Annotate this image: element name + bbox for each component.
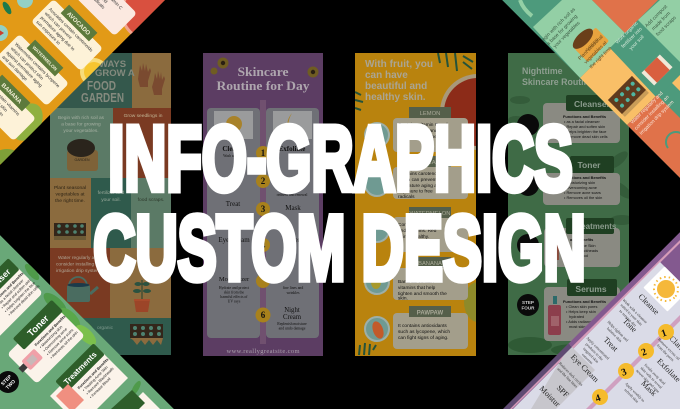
fruit card text: It contains antioxidants <box>398 323 447 329</box>
text: routine steps: and undo damage <box>279 326 306 330</box>
fruit card text: exposure to free <box>398 188 433 194</box>
routine body text: and the fine lines <box>556 367 578 389</box>
routine body text: Apply weekly to <box>624 382 645 403</box>
routine body text: Apply concentrated <box>585 336 610 361</box>
image: palm leaves <box>355 53 473 355</box>
card: treatments <box>544 218 620 267</box>
card: lavender <box>513 262 680 409</box>
routine body text: skin cells to reveal <box>639 366 663 390</box>
card: serums: • Clean skin pores <box>566 304 597 309</box>
routine body text: newer skin and tone <box>635 369 660 394</box>
routine body text: products to the <box>585 342 604 362</box>
card: cleanser: • as a facial cleanser <box>564 119 600 124</box>
cell: soil <box>533 0 625 78</box>
heading: fruit for skin: beautiful and <box>365 81 427 92</box>
card: treatments: Acne Skin <box>578 243 596 248</box>
panel: nighttime skincare routine <box>508 53 634 356</box>
card: serums: hydrated <box>569 314 584 319</box>
card: cleanser: Functions and Benefits <box>563 114 606 119</box>
text: garden tips: made from <box>651 11 672 32</box>
card: cleanser: • Remove dead skin cells <box>564 134 608 139</box>
card: serums: Functions and Benefits <box>563 299 606 304</box>
icon: soil bag <box>569 22 609 62</box>
marker numbers <box>261 150 266 318</box>
card: toner <box>543 156 620 205</box>
fruit card text: premature aging and <box>398 183 443 189</box>
text: soil tip: your vegetables. <box>63 128 99 134</box>
card column: right <box>266 108 319 338</box>
card: treatments: Treatments <box>574 222 617 231</box>
card: cleanser: • Helps brighten the face <box>564 129 606 134</box>
image: grapefruit slice <box>124 0 165 34</box>
tab labels: LEMON <box>420 111 440 117</box>
text: soil tip: a base for growing <box>61 122 101 128</box>
card: watermelon: WATERMELON <box>31 45 59 72</box>
card: toner: Functions and Benefits <box>563 175 606 180</box>
text: routine steps: Toner <box>284 236 301 244</box>
text: garden tips: food scraps <box>655 15 678 38</box>
card: avocado: premature aging due to <box>39 15 76 52</box>
marker numbers: 4 <box>261 240 266 250</box>
card: serums: • Adds radiance to <box>566 319 597 324</box>
foliage <box>508 96 634 356</box>
fruit card text: and vitamins. Red <box>398 228 437 234</box>
diagonal panel: skincare routine (bottom-right) <box>503 232 680 409</box>
routine headings: Mask <box>639 379 658 398</box>
text: routine steps: Treat <box>226 200 240 208</box>
card column: left <box>207 108 260 338</box>
text: treatments benefits: • Treating Acne Skin <box>82 365 109 392</box>
cell: compost <box>638 0 680 62</box>
card: cleanser: • Repair and soften skin <box>564 124 605 129</box>
text: garden tips: irrigation drip system <box>639 100 675 136</box>
card: avocado: sun exposure to <box>35 19 62 46</box>
marker numbers <box>594 328 668 405</box>
icon: pink bottle <box>16 349 43 375</box>
purple lower band <box>503 340 572 409</box>
card: serums: Serums <box>575 284 607 294</box>
card: cleanser: • Helps brighten the face <box>4 281 36 313</box>
card: cleanser: • Remove dead skin cells <box>8 284 40 317</box>
text: planting tip: Plant seasonal <box>54 185 86 191</box>
card: toner <box>1 300 86 385</box>
heading: fruit for skin <box>365 59 433 103</box>
icon: soil bag <box>67 139 98 171</box>
text: garden tips: Water regularly and <box>630 90 665 126</box>
routine headings: Cleanse <box>637 292 661 317</box>
card: treatments: Blood <box>578 253 588 258</box>
step badge: STEP <box>0 373 14 387</box>
heading: nighttime skincare: Skincare Routine <box>522 77 594 87</box>
icon: watering can <box>67 277 98 302</box>
diagonal panel: orange fruit (top-left) <box>0 0 178 165</box>
step badges <box>517 114 539 316</box>
text: planting tip: fertilizer and <box>98 190 125 196</box>
marker numbers: 2 <box>640 347 648 359</box>
icon: sun tile <box>214 111 253 139</box>
icon: seedling tray <box>54 223 86 240</box>
heading: food garden: GROW A <box>95 68 135 79</box>
tab labels: PAWPAW <box>417 310 444 316</box>
card: avocado <box>32 0 102 70</box>
cell: watering <box>627 95 680 178</box>
fruit circles <box>0 0 33 41</box>
step badge label: STEP <box>522 300 534 305</box>
text: treatments benefits <box>77 358 120 401</box>
icon: papaya <box>372 321 384 339</box>
icon: sun tile <box>643 266 680 312</box>
diagonal panel: food garden (top-right) <box>502 0 680 178</box>
card: cleanser <box>543 95 620 143</box>
routine body text: refresh skin <box>623 388 639 404</box>
text: soil tip <box>58 115 105 134</box>
card: treatments: Blackheads <box>578 248 598 253</box>
text: routine steps: Replenish moisture <box>277 322 307 326</box>
heading: skincare routine: Routine for Day <box>216 78 310 93</box>
icon: banana <box>371 282 381 289</box>
image: green pear <box>0 103 43 164</box>
text: routine steps: harmful effects of <box>220 295 248 299</box>
fruit card text: Bananas contain <box>398 279 434 285</box>
numbered markers <box>592 324 674 405</box>
text: planting tip: food scraps. <box>138 197 164 203</box>
foliage <box>23 262 143 396</box>
fruit card text: tighten and smooth the <box>398 291 447 297</box>
heading: skincare routine: Skincare <box>238 64 289 79</box>
panel: fruit for skin <box>355 53 476 356</box>
routine body text: balance skin <box>606 327 622 343</box>
text: routine steps <box>218 145 307 330</box>
text: treatments benefits: Functions and Benefits <box>77 358 109 390</box>
card: treatments: and Benefits <box>570 237 593 242</box>
cell: right yellow <box>672 75 680 91</box>
routine body text: from the pores <box>656 343 675 363</box>
text: watering tip: consider installing an <box>56 262 101 268</box>
text: garden tips: Add compost <box>644 4 669 29</box>
text: routine steps: Eye Cream <box>218 236 250 244</box>
card: toner: • Remove acne scars <box>564 190 601 195</box>
marker numbers: 3 <box>261 204 266 214</box>
heading: nighttime skincare: Nighttime <box>522 66 563 76</box>
text: routine steps: Moisturizer <box>219 276 250 283</box>
tab labels: BANANA <box>418 261 442 267</box>
card: banana: BANANA <box>0 83 23 106</box>
card: serums: most skin <box>569 324 585 329</box>
routine body text: to remove dirt <box>618 309 637 328</box>
text: routine steps: UV rays <box>228 300 241 304</box>
card: watermelon <box>0 29 74 106</box>
pink strip <box>586 315 680 409</box>
fruit card text: skin. <box>398 296 408 302</box>
card: toner: • Overcoming acne <box>42 327 68 353</box>
card: avocado: which can prevent <box>44 11 73 41</box>
image: pear <box>464 282 476 322</box>
heading: food garden: FOOD <box>87 79 116 93</box>
step badge <box>0 371 19 393</box>
card: watermelon: against premature aging <box>5 50 44 88</box>
icon: moon tile <box>273 111 312 139</box>
routine headings <box>538 292 680 409</box>
card: cleanser: Cleanser <box>574 99 611 109</box>
icon: serum bottle <box>548 296 561 335</box>
card: treatments <box>50 343 128 409</box>
marker numbers: 1 <box>660 328 668 340</box>
text: watering tip: Water regularly and <box>58 255 100 261</box>
text: garden tips: fertilizer into <box>620 26 644 50</box>
routine headings: SPF <box>555 383 571 400</box>
card: watermelon: which can protect skin <box>10 46 45 81</box>
routine body text: Scrubs away dead <box>643 363 666 386</box>
tab labels <box>410 111 450 316</box>
heading: food garden: GARDEN <box>81 91 124 105</box>
numbered markers <box>256 146 270 322</box>
fruit card text: such as lycopene, which <box>398 329 450 335</box>
tab labels: AVOCADO <box>416 160 445 166</box>
cell: seasonal vegetables <box>580 48 657 125</box>
card: watermelon: Watermelon contains lycopene <box>14 42 61 89</box>
text: routine steps: Hydrate and protect <box>219 286 250 290</box>
image: grapefruit <box>440 74 476 150</box>
marker numbers: 4 <box>594 393 602 405</box>
card: toner: • Moisturizing skin <box>39 325 63 349</box>
heading: fruit for skin: With fruit, you <box>365 59 433 70</box>
card: toner: Toner <box>26 313 52 339</box>
routine body text: Remove excess oil <box>657 338 680 361</box>
text: treatments benefits: • Remove Blackheads <box>85 367 115 396</box>
text: garden tips: a base for growing <box>546 14 579 47</box>
cell: fertilizer <box>610 20 680 98</box>
fruit circles <box>365 123 389 341</box>
fruit card text <box>398 122 450 341</box>
text: routine steps: Tone <box>227 175 241 183</box>
text: routine steps: Wash and rinse <box>223 154 245 158</box>
text: garden tips <box>539 4 679 137</box>
text: watering tip <box>56 255 102 274</box>
text: garden tips: Begin with rich soil as <box>539 6 577 45</box>
tab labels: WATERMELON <box>410 211 450 217</box>
fruit card text: even out skin tone. <box>398 134 438 140</box>
card: serums <box>126 392 160 409</box>
title: info-graphics custom design <box>93 108 586 300</box>
text: routine steps: SPF <box>229 265 240 272</box>
text: planting tip: Grow seedlings in <box>124 113 163 119</box>
card: watermelon: and sun damage <box>1 54 29 82</box>
panel: food garden <box>50 53 171 355</box>
photo tint band <box>531 345 595 409</box>
icon: soil bag: GARDEN <box>585 38 599 52</box>
card: toner: • Remove acne scars <box>46 328 74 356</box>
step badge label: FOUR <box>521 306 535 310</box>
icon: plant tray <box>130 324 163 345</box>
icon: pink tube <box>56 384 84 409</box>
routine body text: concerns <box>581 353 594 366</box>
fruit card text: can fight signs of aging. <box>398 335 448 341</box>
icon: potted plant <box>133 280 151 312</box>
text: garden tips: your soil <box>628 34 646 52</box>
routine headings: Tone <box>621 316 639 334</box>
fruit card text: vitamins that help <box>398 285 436 291</box>
step badge: TWO <box>5 379 17 391</box>
heading: skincare routine <box>216 67 310 92</box>
card: banana <box>0 64 41 141</box>
tab: treatments: Treatments <box>62 350 99 387</box>
card: avocado: Avocados contain carotenoids <box>48 7 94 53</box>
text: routine steps: wrinkles <box>286 291 300 295</box>
text: routine steps: Cream <box>283 314 302 321</box>
routine body text: Reduces dark circles <box>558 361 584 387</box>
fruit card text: Contains carotenoids <box>398 171 444 177</box>
icon: seedling tile <box>608 76 649 117</box>
icon: sunflowers <box>210 58 318 78</box>
card: cleanser <box>0 256 45 341</box>
heading: food garden: WAYS <box>99 59 126 70</box>
fruit cards <box>393 118 468 349</box>
text: watering tip: irrigation drip system. <box>56 268 102 274</box>
icon: gardening gloves <box>138 63 165 95</box>
text: planting tip: the right time. <box>55 198 85 204</box>
card: toner: Functions and Benefits <box>34 315 66 347</box>
heading: nighttime skincare <box>522 68 586 85</box>
text: garden tips: the right time <box>588 45 613 70</box>
panel: skincare routine for day <box>203 53 323 344</box>
text: garden tips: Plant seasonal <box>577 34 605 62</box>
image: lemon slice <box>80 58 104 82</box>
text: soil tip: Begin with rich soil as <box>58 115 105 121</box>
fruit card text: which can prevent <box>398 177 437 183</box>
routine body text: Wash with a cleanser <box>622 298 648 325</box>
text: routine steps: Night <box>284 307 300 314</box>
icon: trowel <box>520 0 532 16</box>
fruit card tabs <box>409 107 451 317</box>
card: toner: • Removes oil the skin <box>50 331 79 360</box>
routine body text: targeted skin <box>582 347 599 364</box>
fruit card text: radicals <box>398 194 415 200</box>
card: toner: • Overcoming acne <box>564 185 597 190</box>
diagonal panel: skincare steps (bottom-left) <box>0 235 174 409</box>
footer: website <box>203 344 323 356</box>
text: planting tip: vegetables at <box>55 192 85 198</box>
card: toner: • Removes oil the skin <box>564 195 602 200</box>
fruit card text: Contains vitamin C and <box>398 122 448 128</box>
routine body text: Helps tighten and <box>607 320 629 342</box>
heading: fruit for skin: can have <box>365 70 408 81</box>
card: toner: • Moisturizing skin <box>564 180 595 185</box>
icon: fertilizer bottle <box>641 54 673 86</box>
marker numbers: 1 <box>261 148 266 158</box>
card: serums <box>544 279 620 341</box>
text: planting tip: your soil. <box>101 197 121 203</box>
text: garden tips: consider installing an <box>633 94 671 132</box>
icon: watering can <box>666 132 680 148</box>
routine headings: Treat <box>602 335 620 354</box>
text: routine steps: fine lines and <box>283 286 303 290</box>
pink border band <box>509 240 680 409</box>
card: avocado: AVOCADO <box>65 11 91 37</box>
text: routine steps: Mask <box>285 204 301 212</box>
card: serums: • Helps keep skin <box>566 309 596 314</box>
card: lemon <box>78 0 136 34</box>
fruit card text: helps brighten and <box>398 128 438 134</box>
text: garden tips: your vegetables <box>552 20 582 50</box>
routine headings: Moistur <box>538 384 562 409</box>
text: planting tip <box>54 113 164 204</box>
text: garden tips: vegetables at <box>583 40 609 66</box>
routine body text: suited to your skin <box>620 303 643 326</box>
icon: soil bag: GARDEN <box>75 158 90 162</box>
text: garden tips: Work organic <box>615 20 640 46</box>
heading: food garden <box>81 59 135 105</box>
card: toner: Toner <box>578 160 601 170</box>
cell: orange top <box>592 0 658 33</box>
marker numbers: 6 <box>261 310 266 320</box>
text: routine steps: redness and renewal <box>277 193 307 197</box>
fruit card text: skin is healthy. <box>398 234 429 240</box>
text: organic tip: organic <box>97 325 114 331</box>
heading: fruit for skin: healthy skin. <box>365 92 426 103</box>
routine headings: Eye Cream <box>569 352 601 385</box>
marker numbers: 2 <box>261 176 266 186</box>
footer: website: www.reallygreatsite.com <box>226 348 300 355</box>
text: routine steps: Exfoliate <box>279 145 305 153</box>
fruit card text: Contains lycopene <box>398 222 438 228</box>
marker numbers: 3 <box>620 367 628 379</box>
step badge label <box>522 301 534 310</box>
text: routine steps: Cleanse <box>222 145 246 153</box>
routine body text <box>554 298 680 406</box>
tab: serums <box>111 390 145 409</box>
text: treatments benefits: • Increase Blood <box>89 377 111 399</box>
text: routine steps: skin from the <box>224 290 244 294</box>
card: cleanser: • Repair and soften skin <box>0 279 32 310</box>
